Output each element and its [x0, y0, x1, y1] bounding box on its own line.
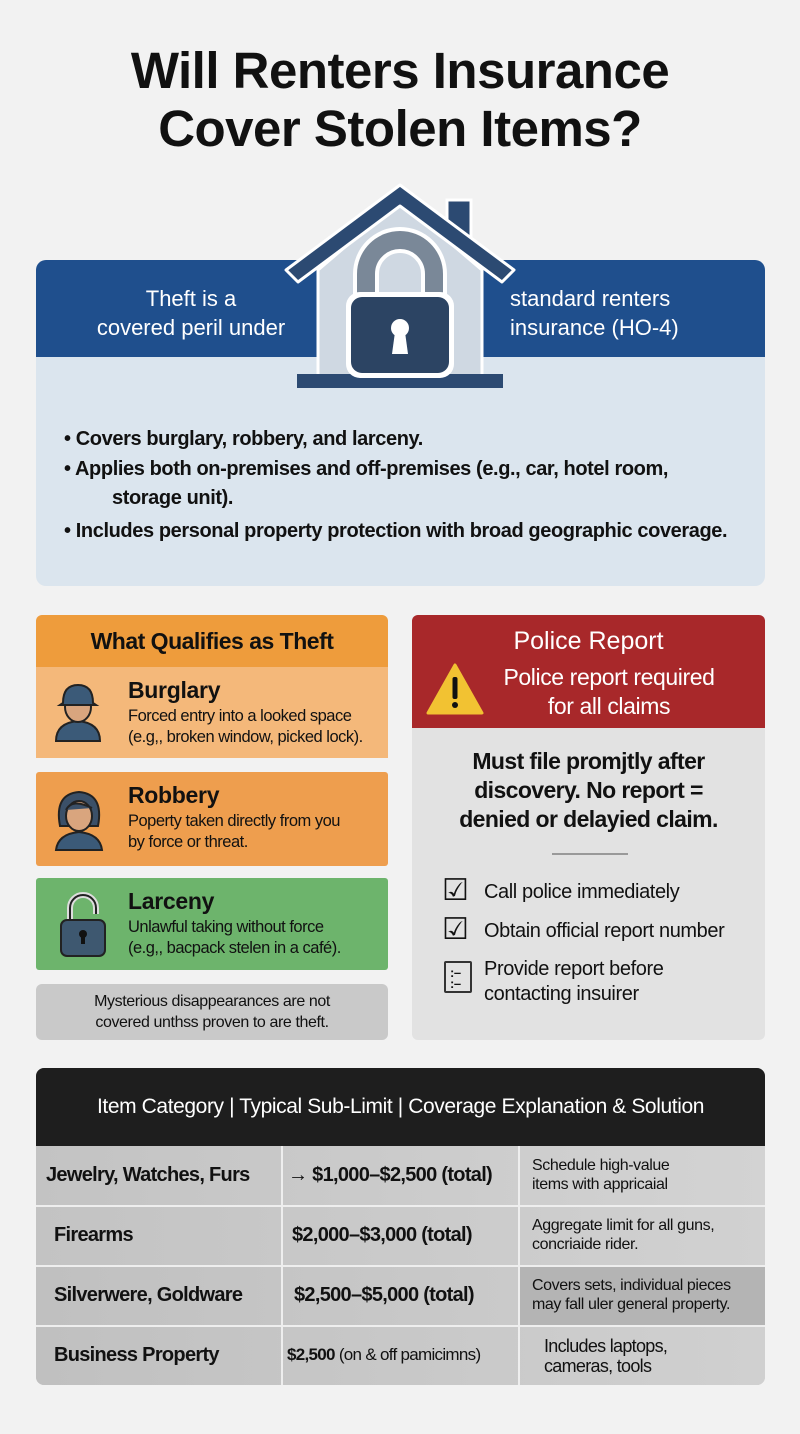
card: robbery: Robbery [128, 782, 219, 808]
table rows: $2,500–$5,000 (total) [294, 1284, 474, 1306]
table rows [36, 1146, 765, 1385]
table rows: Schedule high-value [532, 1157, 669, 1174]
text: must file promptly [459, 748, 718, 832]
note: mysterious disappearance: covered unthss proven to are theft. [95, 1014, 329, 1031]
icon: burglar [55, 684, 101, 742]
panel: police report: Call police immediately [484, 881, 679, 903]
panel: police report [412, 615, 765, 1040]
table rows: may fall uler general property. [532, 1296, 730, 1313]
card: robbery [36, 772, 388, 866]
table rows: Jewelry, Watches, Furs [46, 1164, 250, 1186]
note: mysterious disappearance: Mysterious disappearances are not [94, 993, 330, 1010]
table rows: Firearms [54, 1224, 133, 1246]
panel: police report: contacting insuirer [484, 983, 639, 1005]
table header: Item Category | Typical Sub-Limit | Coverage Explanation & Solution [97, 1095, 704, 1118]
card: burglary [36, 667, 388, 758]
heading: Police Report [513, 627, 664, 655]
panel: police report: :– [450, 976, 461, 991]
header text right: standard renters [510, 286, 670, 311]
icon: house with padlock [284, 184, 516, 388]
title: Cover Stolen Items? [158, 100, 642, 157]
card: larceny: (e.g,, bacpack stelen in a café). [128, 939, 341, 957]
table: sub-limits [36, 1068, 765, 1385]
card: robbery: by force or threat. [128, 833, 248, 851]
table rows: Aggregate limit for all guns, [532, 1217, 714, 1234]
header text left [97, 286, 285, 340]
icon: padlock [60, 892, 106, 957]
heading: What Qualifies as Theft [91, 628, 333, 654]
table rows: items with appricaial [532, 1176, 668, 1193]
heading [36, 615, 388, 667]
bullet list: • Applies both on-premises and off-premises (e.g., car, hotel room, [64, 458, 668, 480]
card: larceny [36, 878, 388, 970]
table rows: Silverwere, Goldware [54, 1284, 242, 1306]
table rows: cameras, tools [544, 1356, 651, 1376]
panel: theft covered [36, 260, 765, 586]
panel: police report: Obtain official report number [484, 920, 724, 942]
title [130, 42, 669, 157]
table rows: → $1,000–$2,500 (total) [288, 1164, 492, 1186]
checklist [442, 874, 724, 1005]
heading: Police report required [503, 664, 715, 690]
card: larceny: Larceny [128, 888, 214, 914]
bullet list [64, 428, 727, 542]
heading [412, 615, 765, 728]
table rows: Covers sets, individual pieces [532, 1277, 731, 1294]
card: burglary: Burglary [128, 677, 220, 703]
table rows: $2,000–$3,000 (total) [292, 1224, 472, 1246]
icon: robber [54, 791, 104, 851]
panel: what qualifies as theft [36, 615, 388, 1040]
blue header band [36, 260, 765, 357]
header text right [510, 286, 679, 340]
text: must file promptly: discovery. No report = [474, 777, 703, 803]
heading: for all claims [548, 693, 670, 719]
bullet list: • Includes personal property protection with broad geographic coverage. [64, 520, 727, 542]
panel: police report: ☑ [442, 913, 468, 946]
table header [36, 1068, 765, 1146]
card: robbery: Poperty taken directly from you [128, 812, 340, 830]
title: Will Renters Insurance [131, 42, 669, 99]
card: larceny: Unlawful taking without force [128, 918, 324, 936]
text: must file promptly: Must file promjtly after [472, 748, 705, 774]
note: mysterious disappearance [36, 984, 388, 1040]
card: burglary: Forced entry into a looked space [128, 707, 351, 725]
header text right: insurance (HO-4) [510, 315, 679, 340]
table rows: concriaide rider. [532, 1236, 638, 1253]
text: must file promptly: denied or delayied claim. [459, 806, 718, 832]
header text left: covered peril under [97, 315, 285, 340]
bullet list: • Covers burglary, robbery, and larceny. [64, 428, 423, 450]
icon: warning [426, 663, 484, 714]
table rows: Business Property [54, 1344, 219, 1366]
panel: police report: :– [450, 965, 461, 980]
panel: police report: ☑ [442, 874, 468, 907]
table rows: Includes laptops, [544, 1336, 667, 1356]
card: burglary: (e.g,, broken window, picked lock). [128, 728, 363, 746]
panel: police report: Provide report before [484, 958, 663, 980]
table rows: $2,500 (on & off pamicimns) [287, 1345, 480, 1364]
header text left: Theft is a [146, 286, 236, 311]
bullet list: storage unit). [112, 487, 233, 509]
